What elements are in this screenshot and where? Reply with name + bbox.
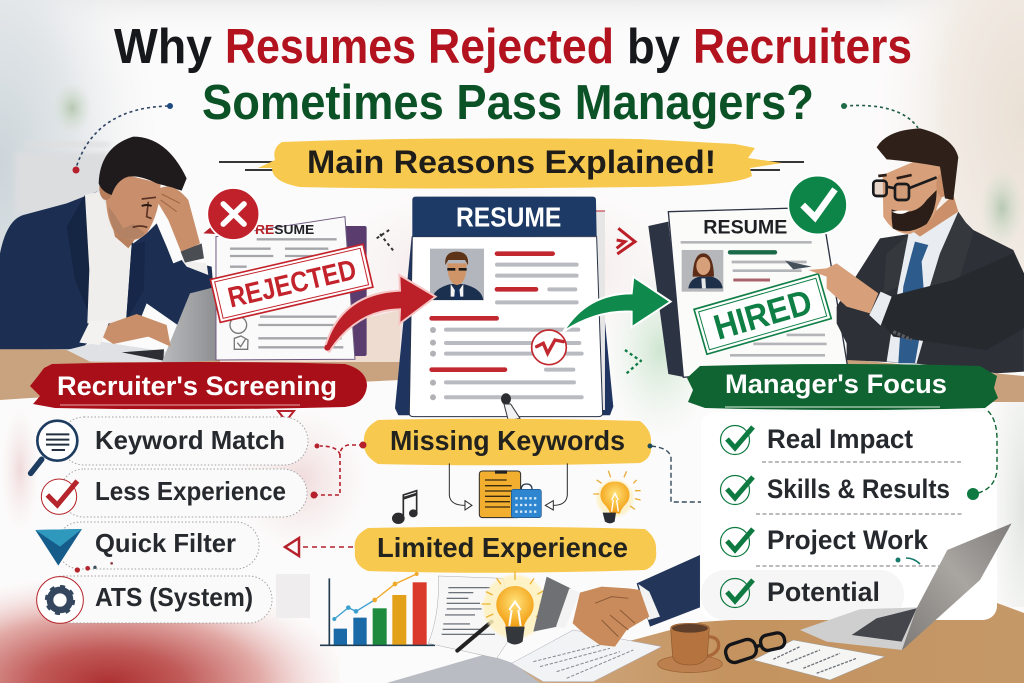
pill: ats system: ATS (System) (95, 582, 253, 612)
pill: quick filter (57, 522, 259, 569)
pill: less experience: Less Experience (95, 476, 286, 506)
recruiter right lapel (126, 242, 145, 322)
recruiter hair (99, 137, 187, 195)
real impact: Real Impact (767, 424, 913, 454)
recruiter shirt cuff (182, 260, 208, 275)
arrow: limited experience to quick filter (285, 538, 353, 556)
finger lines (595, 597, 635, 637)
portrait photo (682, 250, 723, 292)
desk: upper right (846, 359, 1024, 402)
recruiter mouth, nose and brow (133, 197, 156, 227)
recruiter shirt (85, 192, 132, 323)
double chevron red (617, 228, 635, 254)
recruiter hand on forehead (158, 187, 200, 253)
desk: upper left (0, 318, 400, 400)
pill: missing keywords (364, 419, 651, 465)
icon: small light bulb (593, 471, 641, 523)
resume lines (432, 254, 582, 397)
manager neck (913, 195, 958, 237)
manager glasses (873, 177, 937, 200)
list: recruiter checks (40, 417, 308, 623)
manager hair (877, 128, 958, 200)
paper (668, 207, 847, 377)
resume label: RESUME (255, 223, 314, 237)
manager brow (878, 175, 912, 178)
recruiter stubble (108, 207, 145, 240)
manager smile (892, 210, 909, 214)
desk laptop screen (162, 287, 217, 363)
clasped hands (573, 587, 649, 647)
teal dots (896, 558, 920, 564)
manager sleeve buttons (893, 332, 912, 340)
flow arrows (449, 463, 567, 510)
connector: top right dotted (841, 103, 918, 128)
arrow: green to hired (563, 277, 671, 332)
icon: red check (41, 479, 77, 514)
dark pen (785, 261, 812, 269)
reading paper (753, 640, 885, 680)
resume label: RESUME (703, 217, 787, 238)
manager ear (936, 173, 948, 197)
dots between pills (75, 562, 113, 573)
banner: recruiter's screening (30, 362, 367, 409)
manager lapels (883, 212, 973, 313)
icon: large light bulb (482, 572, 548, 644)
right white cuff (638, 584, 660, 620)
paperwork on desk (512, 630, 662, 682)
navy header (412, 197, 597, 237)
binder back (395, 237, 613, 415)
hired stamp: HIRED (710, 283, 816, 348)
banner: recruiter's screening: Recruiter's Screening (57, 371, 337, 401)
desk items: laptop and glasses (724, 523, 1012, 680)
icons: recruiter list (31, 421, 113, 623)
pill: missing keywords: Missing Keywords (390, 425, 625, 456)
recruiter watch (181, 243, 204, 263)
recruiter cuff (79, 320, 110, 345)
arrow: red to centre (324, 275, 436, 352)
skills and results: Skills & Results (767, 474, 950, 504)
icon: gear (37, 577, 83, 623)
title: Rejected (428, 20, 614, 74)
manager shirt cuff (869, 292, 892, 326)
pill: quick filter: Quick Filter (95, 528, 236, 558)
document (479, 470, 521, 518)
potential: Potential (767, 577, 880, 607)
recruiter neck (108, 210, 143, 248)
pill: less experience (60, 469, 307, 517)
connector: missing keywords to manager panel (648, 444, 701, 502)
desk laptop base (67, 342, 167, 363)
purple folder (343, 226, 367, 356)
check icons (230, 317, 248, 349)
recruiter ear (99, 177, 113, 200)
manager beard (892, 190, 937, 231)
side pages (596, 211, 605, 410)
pen clip (501, 393, 520, 421)
green check badge (788, 176, 847, 234)
red marker under screening banner (278, 411, 294, 421)
desk laptop keyboard (122, 349, 164, 361)
chart: growth bars (320, 572, 435, 645)
title: by (627, 20, 680, 74)
title (114, 20, 912, 130)
icon: document and calendar with arrows (320, 463, 722, 683)
coffee cup (658, 623, 722, 673)
text lines (230, 239, 343, 347)
glasses (724, 632, 786, 665)
pill: limited experience (355, 527, 656, 573)
bullets (430, 327, 436, 400)
rejected stamp: REJECTED (225, 254, 359, 315)
pill: limited experience: Limited Experience (377, 532, 628, 563)
subtitle banner (219, 138, 804, 188)
recruiter eye (142, 202, 152, 209)
manager jacket (837, 210, 1024, 373)
person: smiling manager (785, 128, 1024, 373)
manager tie (898, 242, 928, 363)
document: rejected resume (203, 188, 373, 360)
green dashed connector (967, 411, 997, 500)
paper lines (773, 647, 857, 673)
icon: filter triangle (35, 529, 82, 566)
recruiter jacket (0, 192, 213, 349)
handshake (533, 555, 700, 647)
banner: manager's focus (687, 364, 998, 410)
manager face (883, 150, 944, 234)
dark right sleeve (637, 555, 700, 627)
manager pointing hand (808, 263, 878, 313)
resume heading: RESUME (456, 202, 561, 233)
desk: lower right (430, 603, 1024, 683)
recruiter face (106, 175, 161, 240)
paper (216, 217, 355, 360)
calendar (511, 484, 541, 518)
person: stressed recruiter at laptop (0, 137, 217, 363)
red x badge (203, 188, 259, 240)
red signature seal (532, 330, 566, 365)
portrait photo (430, 249, 484, 300)
red page edge (596, 209, 605, 212)
grey left sleeve (533, 577, 571, 632)
muted red line (733, 275, 770, 284)
desk: upper left fade (220, 310, 400, 362)
pocket square (939, 283, 967, 293)
left white cuff (556, 588, 580, 628)
small dashed arrow marks green (625, 350, 642, 373)
manager shirt (887, 210, 958, 363)
coloured lines (730, 246, 775, 259)
laptop keyboard (852, 608, 917, 642)
document: central resume (377, 197, 642, 421)
recruiter finger lines (161, 194, 180, 212)
dark folder (648, 222, 685, 377)
document with pen (428, 576, 513, 658)
dark table mat (387, 654, 540, 683)
manager sleeve (880, 253, 1024, 350)
recruiter typing hand (99, 314, 171, 347)
small dashed arrow marks left (377, 228, 393, 251)
document: hired resume (648, 176, 847, 377)
icon: music note (392, 491, 418, 524)
recruiter lapel (67, 195, 92, 317)
connector: top left dotted (72, 103, 173, 174)
resume lines (681, 242, 827, 355)
title: Why (114, 20, 212, 74)
icon: magnifier (31, 421, 77, 473)
subtitle banner: Main Reasons Explained! (307, 144, 716, 180)
paper (409, 237, 603, 417)
title: Sometimes Pass Managers? (202, 76, 814, 130)
panel: manager's focus (701, 411, 997, 620)
laptop base (800, 607, 920, 650)
pill: keyword match (60, 417, 308, 465)
pill behind potential (701, 570, 904, 620)
laptop screen (902, 523, 1012, 651)
pill: keyword match: Keyword Match (95, 425, 285, 455)
title: Recruiters (693, 20, 912, 74)
banner: manager's focus: Manager's Focus (725, 369, 947, 399)
project work: Project Work (767, 525, 928, 555)
pill: ats system (40, 576, 272, 623)
check icons (720, 426, 753, 608)
dashed separators (756, 462, 962, 618)
title: Resumes (225, 20, 416, 74)
connector: pills to missing keywords (310, 442, 366, 498)
